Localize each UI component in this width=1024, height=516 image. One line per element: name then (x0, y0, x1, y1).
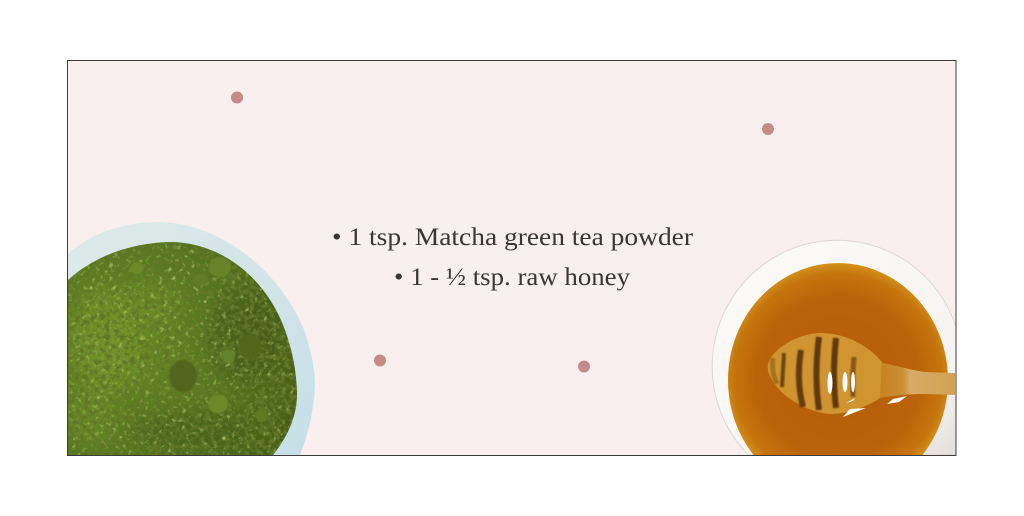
white bowl (712, 240, 956, 455)
decorative dots (231, 92, 774, 372)
dipper head (768, 333, 907, 417)
honey (728, 263, 948, 455)
panel: background (68, 60, 956, 456)
infographic (67, 60, 956, 456)
icon: honey bowl with dipper (712, 240, 956, 455)
matcha powder (62, 240, 300, 455)
ingredient line 1: • 1 tsp. Matcha green tea powder (332, 224, 694, 251)
icon: matcha powder bowl (62, 222, 315, 455)
text block: ingredients (332, 224, 694, 291)
bowl rim (68, 222, 315, 455)
ingredient line 2: • 1 - ½ tsp. raw honey (394, 264, 631, 291)
dipper handle (878, 362, 955, 398)
